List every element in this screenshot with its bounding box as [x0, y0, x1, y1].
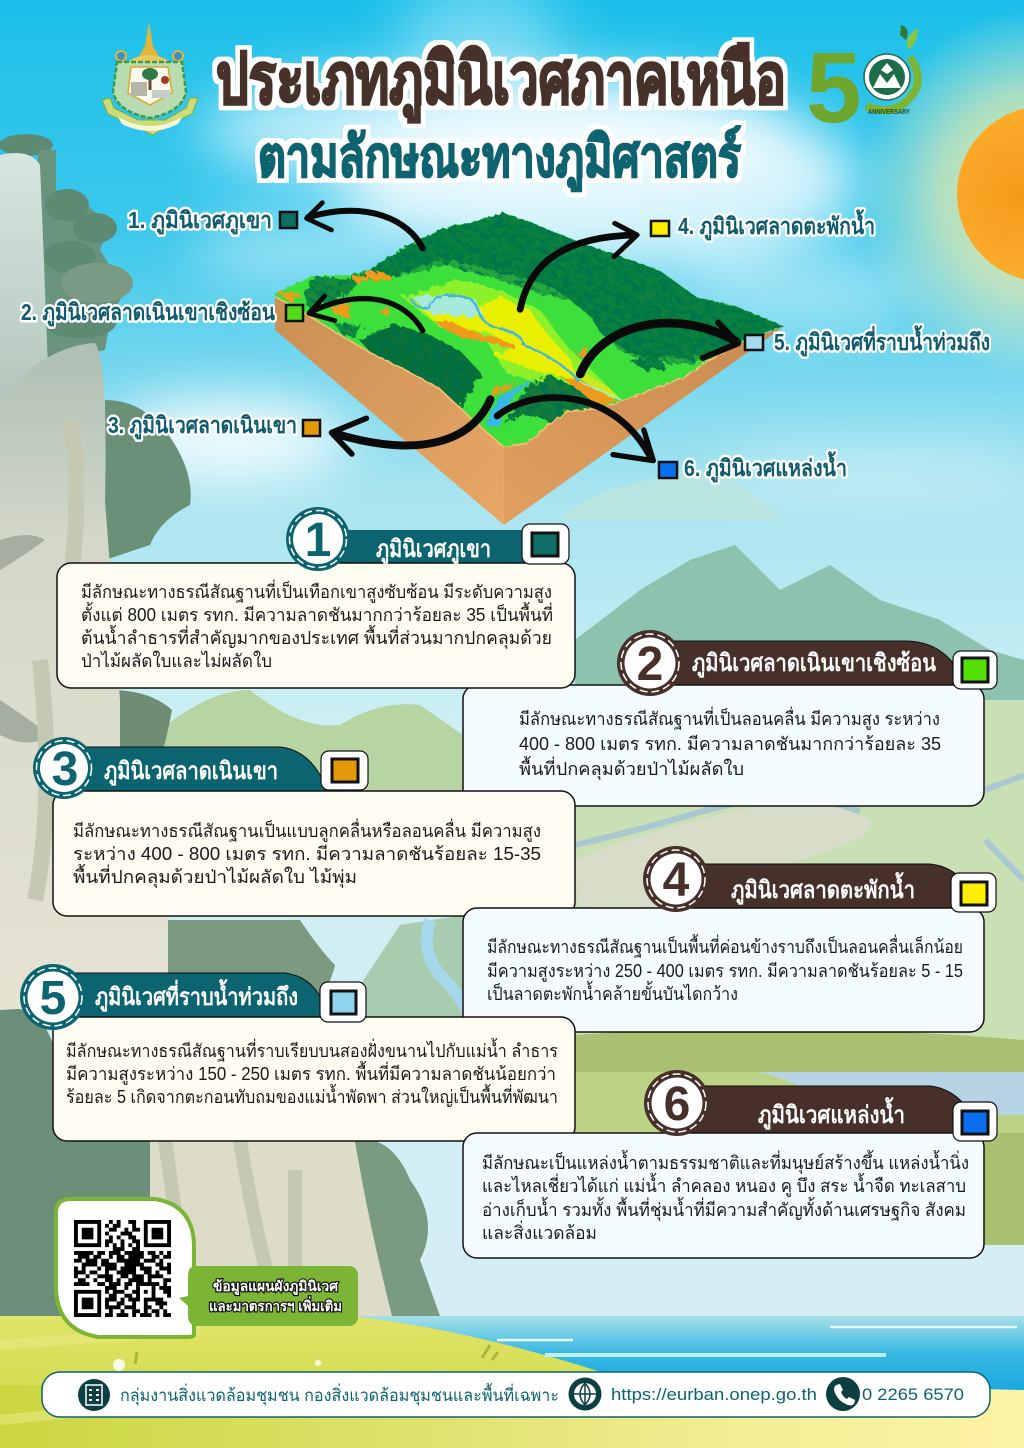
panel 1 swatch [522, 524, 569, 564]
panel 3 number badge [33, 737, 95, 799]
panel 1 text: มีลักษณะทางธรณีสัณฐานที่เป็นเทือกเขาสูงซับซ้อน มีระดับความสูง [81, 579, 552, 603]
panel 6 text: และไหลเชี่ยวได้แก่ แม่น้ำ ลำคลอง หนอง คู บึง สระ น้ำจืด ทะเลสาบ [482, 1173, 966, 1197]
panel 3 number badge: 3 [52, 743, 78, 796]
panel 1 title: ภูมินิเวศภูเขา [376, 536, 491, 564]
QR caption bubble: ข้อมูลแผนผังภูมินิเวศ [213, 1278, 339, 1295]
panel 6 swatch [953, 1102, 997, 1141]
panel 4 header [680, 864, 962, 908]
panel 6 title: ภูมินิเวศแหล่งน้ำ [758, 1096, 905, 1130]
panel 5 text [66, 1038, 558, 1107]
panel 5 text: ร้อยละ 5 เกิดจากตะกอนทับถมของแม่น้ำพัดพา ส่วนใหญ่เป็นพื้นที่พัฒนา [66, 1084, 558, 1107]
panel 1 text [81, 579, 553, 671]
QR caption bubble [179, 1266, 358, 1326]
map label 6: 6. ภูมินิเวศแหล่งน้ำ [684, 451, 847, 483]
panel 5 number badge: 5 [40, 972, 66, 1025]
footer phone number: 0 2265 6570 [862, 1385, 964, 1404]
terrain right earth face [504, 327, 784, 525]
terrain left earth face [275, 295, 504, 525]
panel 2 number badge [617, 630, 683, 696]
footer agency text: กลุ่มงานสิ่งแวดล้อมชุมชน กองสิ่งแวดล้อมชุมชนและพื้นที่เฉพาะ [120, 1383, 559, 1406]
panel 4 number badge: 4 [663, 854, 690, 907]
panel 6 number badge [644, 1070, 710, 1136]
panel 2 header [660, 641, 958, 685]
panel 3 header [70, 747, 325, 791]
logo: department crest [102, 22, 198, 135]
footer website: https://eurban.onep.go.th [611, 1385, 817, 1404]
panel 6 text: อ่างเก็บน้ำ รวมทั้ง พื้นที่ชุ่มน้ำที่มีความสำคัญทั้งด้านเศรษฐกิจ สังคม [482, 1197, 966, 1221]
arrow to label 2 [309, 296, 423, 331]
panel 2 number badge: 2 [637, 638, 663, 691]
panel 5 number badge [20, 964, 86, 1030]
panel 3 title: ภูมินิเวศลาดเนินเขา [104, 758, 278, 786]
arrows [307, 203, 738, 461]
arrow to label 5 [580, 323, 738, 374]
panel 4 swatch [951, 873, 996, 912]
logo: 50th anniversary [806, 25, 918, 144]
background: sun [855, 9, 1024, 379]
panel 1 body [57, 563, 575, 688]
background: clouds [110, 0, 1024, 500]
panel 6 text: มีลักษณะเป็นแหล่งน้ำตามธรรมชาติและที่มนุษย์สร้างขึ้น แหล่งน้ำนิ่ง [482, 1150, 969, 1174]
panel 4 [463, 846, 996, 1032]
map label 4: 4. ภูมินิเวศลาดตะพักน้ำ [678, 209, 875, 241]
QR caption bubble: และมาตรการฯ เพิ่มเติม [209, 1296, 342, 1314]
panel 6 text [482, 1150, 969, 1243]
panel 5 [20, 964, 575, 1141]
panel 4 text [487, 934, 963, 1004]
panel 3 text: ระหว่าง 400 - 800 เมตร รทก. มีความลาดชันร้อยละ 15-35 [73, 844, 541, 864]
panel 5 swatch [320, 982, 366, 1022]
panel 1 text: ตั้งแต่ 800 เมตร รทก. มีความลาดชันมากกว่าร้อยละ 35 เป็นพื้นที่ [81, 602, 553, 625]
map label 3: 3. ภูมินิเวศลาดเนินเขา [108, 412, 297, 440]
panel 3 swatch [321, 751, 368, 790]
QR card [56, 1199, 194, 1337]
panel 5 text: มีลักษณะทางธรณีสัณฐานที่ราบเรียบบนสองฝั่งขนานไปกับแม่น้ำ ลำธาร [66, 1038, 558, 1062]
panel 2 swatch [953, 651, 997, 689]
illustration: terrain block [270, 200, 800, 525]
panel 6 header [690, 1086, 965, 1133]
footer contact bar [42, 1372, 990, 1417]
panel 1 [57, 507, 575, 688]
map label 6 [659, 451, 847, 483]
icon: building [78, 1379, 110, 1411]
panel 4 body [463, 908, 984, 1032]
panel 3 body [53, 791, 575, 916]
panel 4 title: ภูมินิเวศลาดตะพักน้ำ [731, 871, 915, 905]
panel 6 text: และสิ่งแวดล้อม [482, 1220, 597, 1243]
map label 4 [651, 209, 875, 241]
logo: 50th anniversary: ANNIVERSARY [868, 109, 910, 116]
background: water [320, 1316, 1024, 1390]
panel 2 text [519, 706, 941, 780]
panel 1 text: ป่าไม้ผลัดใบและไม่ผลัดใบ [81, 650, 272, 671]
background: left cliff [0, 153, 392, 1316]
map label 1: 1. ภูมินิเวศภูเขา [128, 207, 272, 235]
panel 3 text: มีลักษณะทางธรณีสัณฐานเป็นแบบลูกคลื่นหรือลอนคลื่น มีความสูง [73, 818, 541, 842]
panel 5 body [53, 1017, 575, 1141]
panel 5 title: ภูมินิเวศที่ราบน้ำท่วมถึง [95, 978, 298, 1012]
panel 2 body [463, 685, 984, 806]
panel 2 text: 400 - 800 เมตร รทก. มีความลาดชันมากกว่าร้อยละ 35 [519, 734, 941, 754]
panel 2 text: มีลักษณะทางธรณีสัณฐานที่เป็นลอนคลื่น มีความสูง ระหว่าง [519, 706, 940, 730]
panel 5 header [70, 973, 322, 1017]
arrow to label 3 [332, 399, 490, 454]
panel 2 title: ภูมินิเวศลาดเนินเขาเชิงซ้อน [692, 650, 936, 678]
panel 6 number badge: 6 [664, 1078, 690, 1131]
panel 6 [463, 1070, 997, 1258]
arrow to label 1 [307, 203, 423, 248]
panel 4 text: มีลักษณะทางธรณีสัณฐานเป็นพื้นที่ค่อนข้างราบถึงเป็นลอนคลื่นเล็กน้อย [487, 934, 963, 958]
arrow to label 6 [497, 398, 653, 461]
logo: 50th anniversary: 5 [806, 32, 862, 144]
background: ground [0, 1316, 1024, 1448]
panel 3 text [73, 818, 541, 888]
panel 1 number badge: 1 [305, 514, 331, 567]
terrain map surface [274, 211, 784, 448]
panel 1 header [330, 530, 530, 566]
panel 2 [463, 630, 997, 806]
title line 2: ตามลักษณะทางภูมิศาสตร์ [258, 125, 741, 192]
panel 4 number badge [643, 846, 709, 912]
QR code [74, 1222, 171, 1315]
panel 3 text: พื้นที่ปกคลุมด้วยป่าไม้ผลัดใบ ไม้พุ่ม [73, 864, 357, 888]
panel 5 text: มีความสูงระหว่าง 150 - 250 เมตร รทก. พื้นที่มีความลาดชันน้อยกว่า [66, 1061, 556, 1085]
background: distant mountains and valley [150, 471, 1024, 1245]
arrow to label 4 [520, 223, 637, 309]
map label 2: 2. ภูมินิเวศลาดเนินเขาเชิงซ้อน [21, 299, 275, 327]
panel 4 text: มีความสูงระหว่าง 250 - 400 เมตร รทก. มีความลาดชันร้อยละ 5 - 15 [487, 961, 963, 982]
background: left trees [0, 134, 440, 1316]
title line 1: ประเภทภูมินิเวศภาคเหนือ [216, 40, 786, 123]
icon: phone [826, 1377, 860, 1411]
terrain front rim [275, 297, 740, 447]
panel 1 text: ต้นน้ำลำธารที่สำคัญมากของประเทศ พื้นที่ส่วนมากปกคลุมด้วย [81, 625, 552, 649]
panel 4 text: เป็นลาดตะพักน้ำคล้ายขั้นบันไดกว้าง [487, 981, 738, 1004]
panel 2 text: พื้นที่ปกคลุมด้วยป่าไม้ผลัดใบ [519, 756, 744, 780]
panel 3 [33, 737, 575, 916]
icon: globe [568, 1378, 602, 1410]
panel 6 body [463, 1133, 984, 1258]
map label 5 [745, 325, 990, 357]
panel 1 number badge [286, 507, 350, 571]
